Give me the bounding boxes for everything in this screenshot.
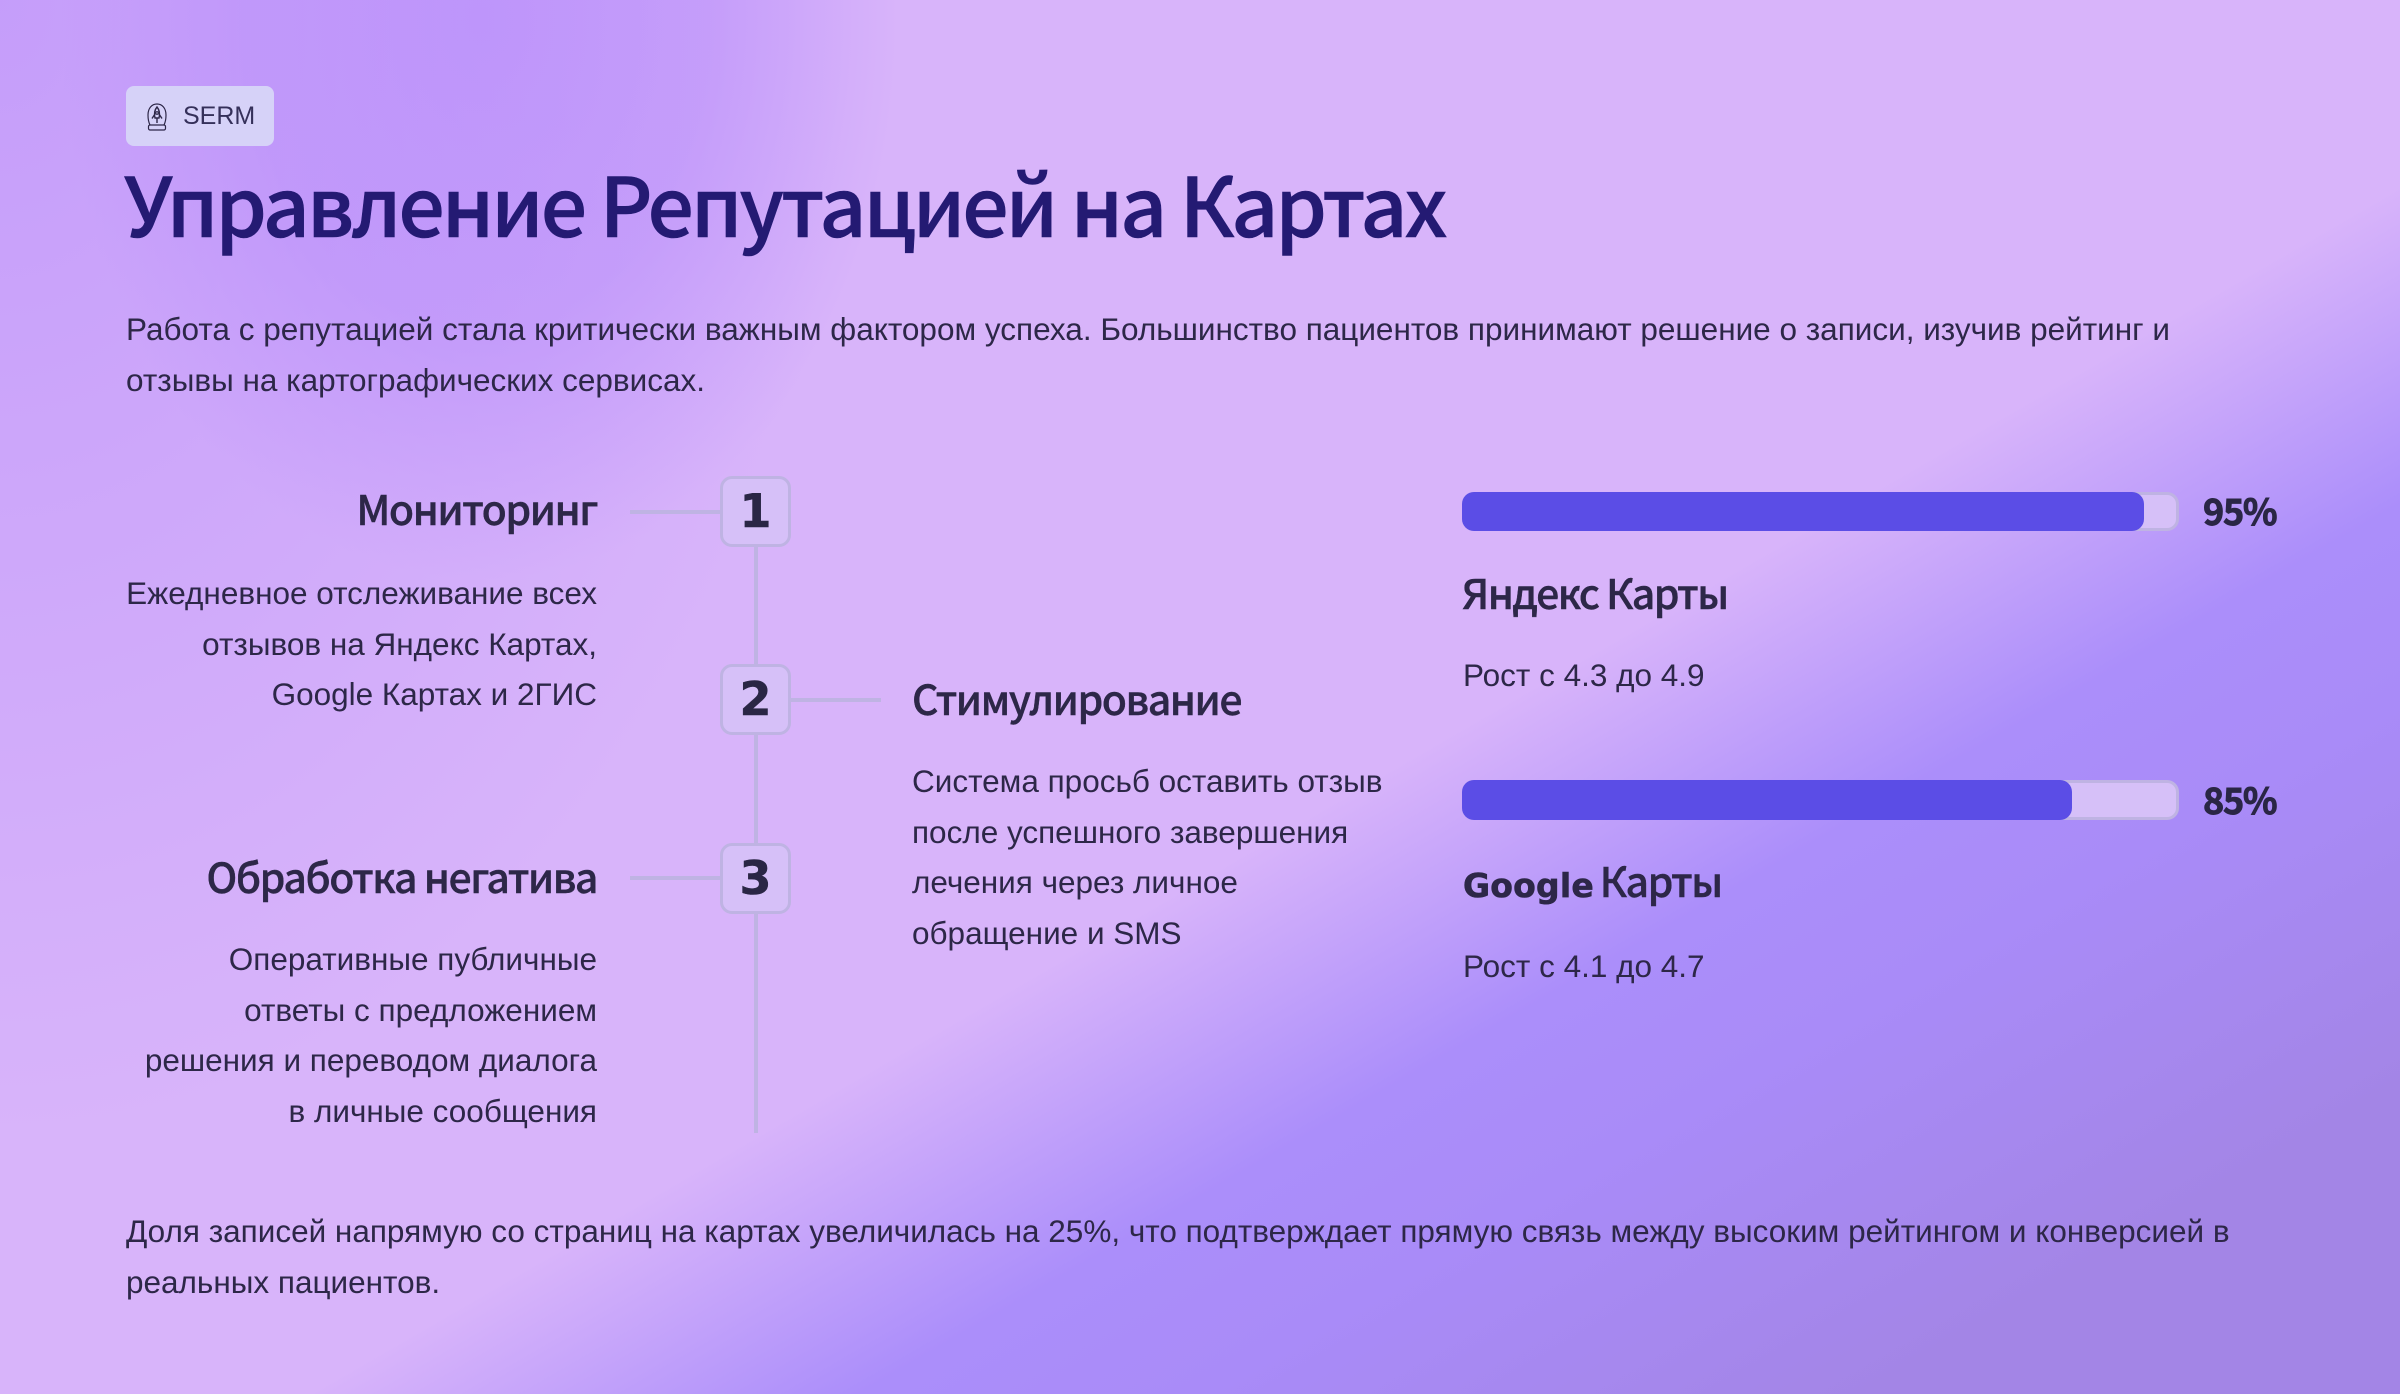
value: 95%: 95% bbox=[2203, 484, 2276, 536]
step number 2 bbox=[720, 664, 791, 735]
text: negative handling description: решения и переводом диалога bbox=[145, 1042, 597, 1078]
heading: Яндекс Карты: Яндекс Карты bbox=[1462, 561, 1728, 621]
text: stimulation description: лечения через личное bbox=[912, 864, 1238, 900]
text: monitoring description: Google Картах и 2ГИС bbox=[272, 676, 597, 712]
badge label: SERM bbox=[183, 102, 255, 130]
step number 3 bbox=[720, 843, 791, 914]
step number 3: 3 bbox=[739, 851, 772, 905]
progress bar: Яндекс Карты 95% bbox=[1462, 492, 2179, 531]
text: monitoring description bbox=[126, 575, 597, 712]
text: negative handling description: в личные сообщения bbox=[288, 1092, 597, 1128]
connector to step 1 bbox=[630, 510, 720, 514]
badge: SERM bbox=[126, 86, 274, 146]
text: stimulation description: после успешного завершения bbox=[912, 814, 1348, 850]
footer text: Доля записей напрямую со страниц на картах увеличилась на 25%, что подтверждает прямую связь между высоким рейтингом и конверсией в bbox=[126, 1213, 2230, 1249]
heading: Обработка негатива: Обработка негатива bbox=[206, 845, 597, 905]
intro text: отзывы на картографических сервисах. bbox=[126, 362, 705, 398]
footer text: реальных пациентов. bbox=[126, 1264, 440, 1300]
text: negative handling description: ответы с предложением bbox=[244, 992, 597, 1028]
text: stimulation description: обращение и SMS bbox=[912, 914, 1182, 950]
heading: Google Карты: Google Карты bbox=[1463, 849, 1722, 909]
text: stimulation description bbox=[912, 763, 1383, 950]
title: Управление Репутацией на Картах bbox=[124, 142, 1445, 261]
footer text bbox=[126, 1213, 2230, 1300]
step number 1: 1 bbox=[739, 484, 772, 538]
bar fill 85% bbox=[1462, 780, 2072, 820]
heading: Стимулирование: Стимулирование bbox=[912, 667, 1241, 727]
text: monitoring description: отзывов на Яндекс Картах, bbox=[202, 626, 597, 662]
text: stimulation description: Система просьб оставить отзыв bbox=[912, 763, 1383, 799]
step number 2: 2 bbox=[739, 672, 772, 726]
text: Google growth: Рост с 4.1 до 4.7 bbox=[1463, 948, 1705, 984]
text: negative handling description: Оперативные публичные bbox=[229, 941, 597, 977]
connector to step 3 bbox=[630, 876, 720, 880]
intro text: Работа с репутацией стала критически важным фактором успеха. Большинство пациентов принимают решение о записи, изучив рейтинг и bbox=[126, 311, 2170, 347]
value: 85%: 85% bbox=[2203, 773, 2276, 825]
connector to step 2 bbox=[790, 698, 881, 702]
bar fill 95% bbox=[1462, 492, 2144, 531]
timeline connector: vertical line bbox=[754, 545, 758, 1133]
text: monitoring description: Ежедневное отслеживание всех bbox=[126, 575, 597, 611]
progress bar: Google Карты 85% bbox=[1462, 780, 2179, 820]
intro text bbox=[126, 311, 2170, 398]
heading: Мониторинг: Мониторинг bbox=[356, 477, 597, 537]
text: Yandex growth: Рост с 4.3 до 4.9 bbox=[1463, 657, 1705, 693]
step number 1 bbox=[720, 476, 791, 547]
text: negative handling description bbox=[145, 941, 597, 1128]
icon: rocket in globe bbox=[147, 103, 167, 131]
